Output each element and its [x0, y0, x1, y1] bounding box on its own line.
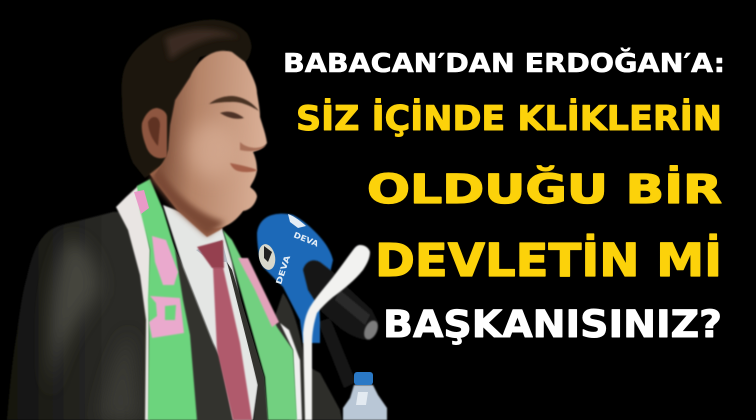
nose shadow [240, 142, 266, 151]
headline line 1: BABACAN′DAN ERDOĞAN′A: [283, 47, 725, 79]
lips [230, 163, 257, 172]
headline line 2: SİZ İÇİNDE KLİKLERİN [296, 98, 722, 139]
microphone logo badge [256, 243, 278, 271]
eye [220, 112, 244, 119]
microphone: black body [303, 260, 381, 342]
ear [142, 108, 167, 158]
jacket [7, 210, 342, 420]
scarf: right green band [223, 230, 302, 420]
water bottle [343, 372, 387, 420]
face [155, 51, 267, 228]
scarf: white edge [116, 186, 150, 420]
jacket right side behind microphone [270, 293, 342, 420]
shirt [163, 205, 258, 420]
hair highlight [165, 29, 240, 60]
scarf: left green band [134, 179, 197, 420]
headline line 3: OLDUĞU BİR [367, 165, 722, 213]
microphone: blue windscreen [256, 214, 333, 343]
headline line 4: DEVLETİN Mİ [375, 234, 722, 287]
cheek highlight [188, 122, 236, 178]
photo: speaker at podium [7, 20, 387, 420]
microphone: blue windscreen: DEVA [292, 231, 321, 249]
neck [148, 150, 250, 237]
hair [122, 20, 251, 178]
shirt collar shadow [196, 240, 230, 272]
right lapel [227, 262, 268, 420]
microphone stand [318, 318, 356, 388]
headline [283, 47, 725, 346]
scarf: pink lettering [149, 236, 184, 338]
white microphone arm [303, 245, 370, 420]
jaw shadow [150, 170, 225, 236]
brow [209, 96, 259, 111]
headline line 5: BAŞKANISINIZ? [383, 303, 722, 346]
left lapel [165, 225, 233, 420]
microphone: blue windscreen: DEVA [274, 253, 292, 286]
tie [197, 240, 252, 420]
